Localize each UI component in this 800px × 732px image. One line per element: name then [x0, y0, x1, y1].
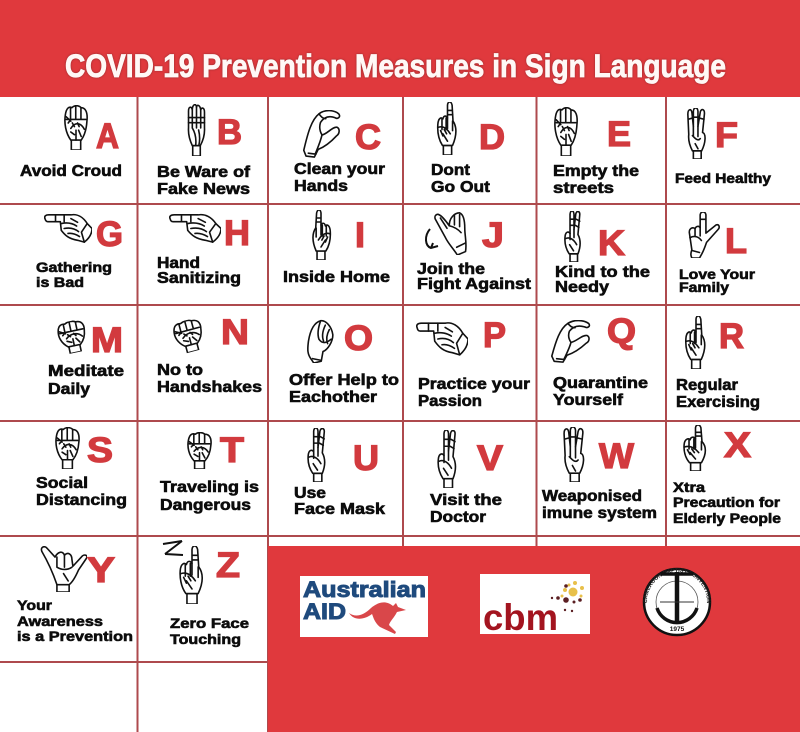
cell: H	[157, 214, 250, 287]
cell: Z	[163, 541, 249, 647]
label: Love Your Family	[679, 266, 756, 295]
label: Gathering is Bad	[36, 259, 112, 290]
cell: E	[553, 108, 639, 197]
logo: Australian AID: Australian	[303, 577, 426, 602]
icon: hand sign E	[555, 108, 577, 156]
label: Zero Face Touching: Zero Face	[170, 615, 249, 631]
cell: O	[289, 319, 399, 406]
cell: P	[417, 316, 530, 410]
label: Dont Go Out: Dont	[431, 162, 470, 179]
label: Join the Fight Against: Join the	[417, 261, 485, 278]
label: No to Handshakes	[157, 362, 262, 396]
logo: Australian AID: AID	[303, 599, 346, 624]
icon: hand sign S	[56, 428, 79, 469]
label: Zero Face Touching	[170, 615, 249, 647]
icon: hand sign A	[65, 106, 87, 150]
label: Dont Go Out	[431, 162, 490, 196]
logo: cbm	[480, 574, 590, 638]
label: Gathering is Bad: Gathering	[36, 259, 112, 275]
cell: Y	[17, 547, 133, 644]
label: Hand Sanitizing	[157, 255, 241, 287]
logo: seal	[642, 568, 712, 636]
label: Quarantine Yourself: Yourself	[553, 392, 624, 409]
label: Zero Face Touching: Touching	[170, 631, 241, 647]
cell: X	[673, 425, 782, 526]
label: Quarantine Yourself: Quarantine	[553, 375, 648, 392]
label: Use Face Mask	[294, 485, 385, 518]
cell: J	[417, 213, 531, 293]
letter H: H	[224, 214, 250, 253]
label: Practice your Passion	[418, 376, 530, 410]
letter S: S	[87, 431, 113, 470]
label: Your Awareness is a Prevention: Awareness	[17, 613, 103, 629]
cell: A	[20, 106, 122, 180]
letter P: P	[483, 316, 506, 355]
letter R: R	[719, 317, 744, 356]
icon: hand sign W	[564, 427, 584, 482]
icon: hand sign P	[417, 323, 468, 355]
cell: K	[555, 211, 650, 296]
cell: N	[157, 313, 262, 396]
label: Kind to the Needy	[555, 264, 650, 296]
label: Inside Home: Inside Home	[283, 269, 390, 286]
label: Xtra Precaution for Elderly People: Precaution for	[673, 495, 781, 510]
label: Empty the streets: streets	[553, 180, 614, 197]
logo: Australian AID	[300, 576, 428, 637]
letter C: C	[355, 118, 381, 157]
letter D: D	[479, 118, 505, 157]
letter K: K	[598, 224, 625, 263]
label: Traveling is Dangerous: Dangerous	[160, 497, 251, 514]
letter E: E	[607, 115, 631, 154]
label: Social Distancing: Distancing	[36, 492, 127, 509]
icon: hand sign Z	[163, 541, 202, 604]
icon: hand sign H	[170, 215, 221, 242]
letter A: A	[96, 117, 119, 156]
cell: I	[283, 210, 390, 286]
label: Your Awareness is a Prevention: is a Prevention	[17, 628, 133, 644]
label: Social Distancing	[36, 475, 127, 509]
cell: B	[157, 105, 251, 198]
label: Visit the Doctor: Visit the	[430, 492, 502, 509]
cell: Q	[552, 312, 648, 409]
label: Gathering is Bad: is Bad	[36, 274, 84, 290]
cell: S	[36, 428, 127, 509]
label: Empty the streets	[553, 163, 639, 197]
icon: hand sign L	[689, 212, 719, 258]
logo: seal: CAMEROON BAPTIST CONVENTION	[644, 568, 710, 603]
icon: hand sign J	[426, 213, 466, 255]
letter L: L	[725, 222, 747, 261]
label: Visit the Doctor	[430, 492, 502, 526]
icon: hand sign B	[188, 105, 205, 156]
label: Practice your Passion: Passion	[418, 393, 482, 410]
icon: hand sign R	[686, 316, 705, 369]
icon: hand sign D	[438, 102, 456, 155]
label: Meditate Daily: Daily	[48, 381, 90, 398]
label: Weaponised imune system: Weaponised	[542, 488, 642, 505]
icon: hand sign Y	[41, 547, 87, 592]
icon: hand sign O	[308, 321, 333, 363]
label: Weaponised imune system	[542, 488, 657, 522]
header band	[0, 0, 800, 97]
icon: hand sign N	[172, 317, 206, 355]
label: Clean your Hands	[294, 161, 385, 195]
label: Meditate Daily: Meditate	[48, 363, 124, 380]
label: Social Distancing: Social	[36, 475, 88, 492]
label: Love Your Family: Family	[679, 279, 729, 295]
icon: hand sign U	[308, 428, 325, 482]
panel: sponsors	[268, 546, 800, 732]
label: Quarantine Yourself	[553, 375, 648, 409]
cell: L	[679, 212, 756, 295]
label: Clean your Hands: Hands	[294, 178, 348, 195]
label: Visit the Doctor: Doctor	[430, 509, 486, 526]
label: Kind to the Needy: Kind to the	[555, 264, 650, 281]
icon: hand sign V	[438, 430, 455, 488]
label: Love Your Family: Love Your	[679, 266, 756, 282]
title: COVID-19 Prevention Measures in Sign Language	[65, 48, 726, 84]
letter G: G	[96, 215, 123, 254]
icon: hand sign G	[45, 215, 92, 242]
icon: hand sign C	[304, 111, 340, 157]
label: Practice your Passion: Practice your	[418, 376, 530, 393]
label: No to Handshakes: No to	[157, 362, 203, 379]
letter W: W	[599, 437, 634, 476]
letter F: F	[715, 116, 738, 155]
cell: D	[431, 102, 505, 196]
cell: G	[36, 215, 123, 290]
letter U: U	[353, 439, 379, 478]
cell: F	[675, 108, 772, 186]
label: Traveling is Dangerous: Traveling is	[160, 479, 259, 496]
label: Offer Help to Eachother: Offer Help to	[289, 372, 399, 389]
label: Offer Help to Eachother: Eachother	[289, 389, 377, 406]
letter J: J	[482, 216, 504, 255]
letter O: O	[344, 319, 373, 358]
icon: hand sign Q	[552, 321, 589, 362]
cell: V	[430, 430, 504, 526]
cell: R	[676, 316, 760, 411]
label: Your Awareness is a Prevention: Your	[17, 597, 53, 613]
logo: cbm: cbm	[483, 597, 558, 638]
letter M: M	[91, 321, 123, 360]
letter Q: Q	[607, 312, 636, 351]
cell: W	[542, 427, 657, 522]
label: Be Ware of Fake News	[157, 164, 251, 198]
letter X: X	[724, 426, 752, 465]
cell: U	[294, 428, 385, 518]
icon: hand sign T	[188, 433, 211, 469]
label: Join the Fight Against: Fight Against	[417, 276, 531, 293]
icon: hand sign F	[688, 108, 705, 159]
cell: C	[294, 111, 385, 195]
label: Dont Go Out: Go Out	[431, 179, 490, 196]
label: Regular Exercising	[676, 377, 760, 411]
letter I: I	[355, 216, 365, 255]
letter Z: Z	[216, 546, 240, 585]
label: Xtra Precaution for Elderly People: Elderly People	[673, 511, 782, 526]
label: Offer Help to Eachother	[289, 372, 399, 406]
icon: hand sign X	[684, 425, 705, 471]
label: Use Face Mask: Face Mask	[294, 501, 385, 518]
label: Clean your Hands: Clean your	[294, 161, 385, 178]
label: Empty the streets: Empty the	[553, 163, 639, 180]
cell: M	[48, 319, 124, 398]
label: Kind to the Needy: Needy	[555, 279, 609, 296]
letter N: N	[221, 313, 249, 352]
label: Meditate Daily	[48, 363, 124, 398]
label: Regular Exercising: Exercising	[676, 394, 760, 411]
label: Hand Sanitizing: Sanitizing	[157, 270, 241, 287]
icon: hand sign I	[313, 210, 330, 260]
label: Use Face Mask: Use	[294, 485, 326, 502]
label: Avoid Croud: Avoid Croud	[20, 163, 122, 180]
label: Hand Sanitizing: Hand	[157, 255, 200, 272]
label: Be Ware of Fake News: Be Ware of	[157, 164, 251, 181]
label: No to Handshakes: Handshakes	[157, 379, 262, 396]
logo: seal: 1975	[670, 626, 685, 633]
label: Xtra Precaution for Elderly People	[673, 480, 782, 526]
icon: hand sign M	[56, 319, 89, 355]
label: Be Ware of Fake News: Fake News	[157, 181, 250, 198]
letter T: T	[220, 431, 244, 470]
label: Your Awareness is a Prevention	[17, 597, 133, 644]
icon: hand sign K	[565, 211, 580, 262]
cell: T	[160, 431, 259, 514]
label: Xtra Precaution for Elderly People: Xtra	[673, 480, 706, 495]
letter Y: Y	[87, 551, 115, 590]
letter V: V	[477, 439, 504, 478]
label: Traveling is Dangerous	[160, 479, 259, 514]
label: Join the Fight Against	[417, 261, 531, 293]
label: Weaponised imune system: imune system	[542, 505, 657, 522]
label: Regular Exercising: Regular	[676, 377, 738, 394]
letter B: B	[217, 113, 242, 152]
label: Feed Healthy: Feed Healthy	[675, 171, 772, 186]
